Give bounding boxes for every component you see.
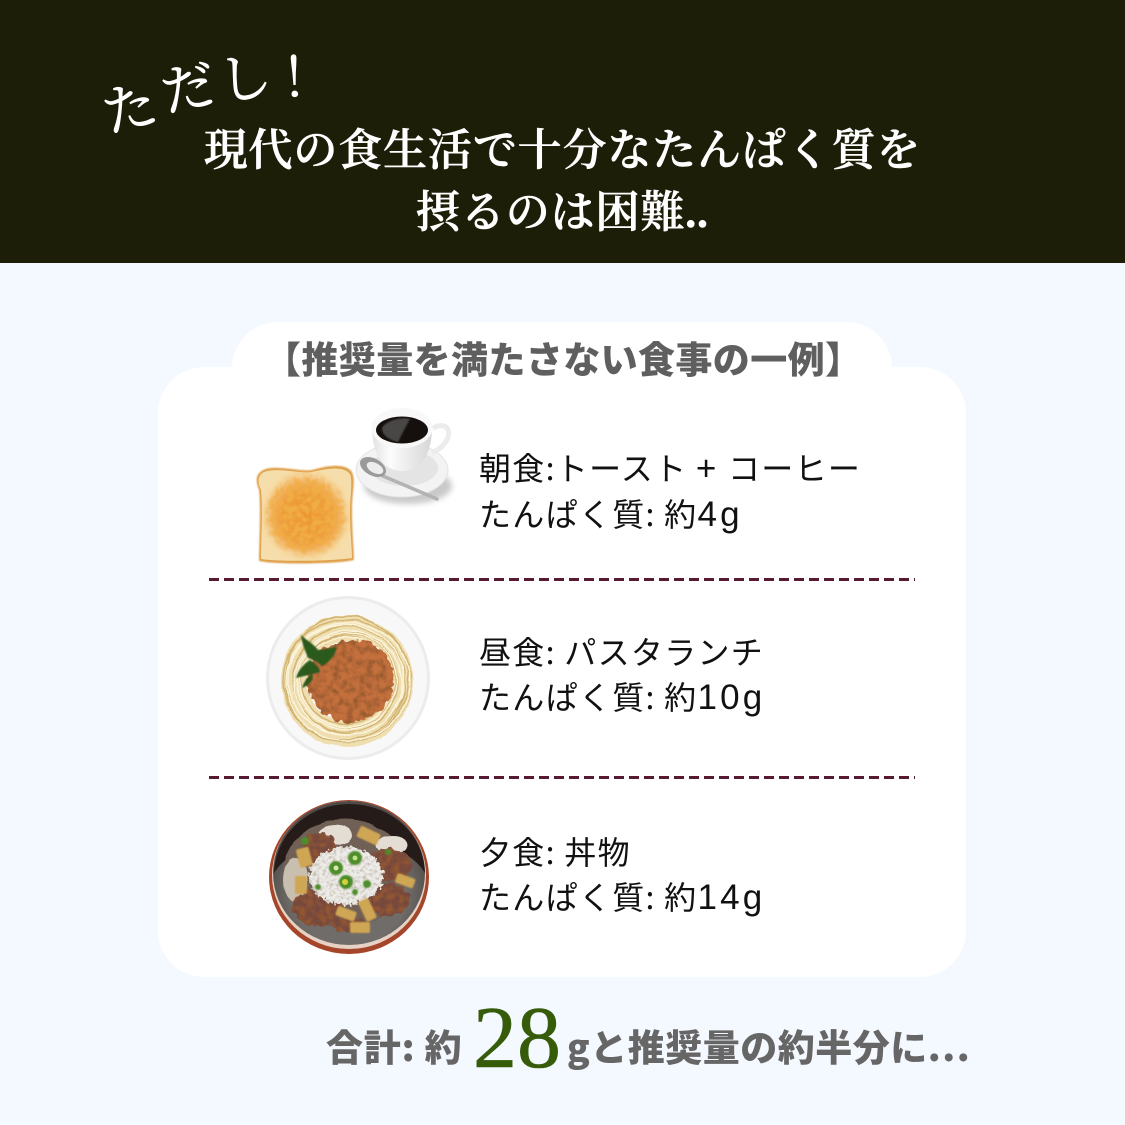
breakfast text: 朝食:トースト + コーヒー xyxy=(479,444,861,490)
dinner text: 夕食: 丼物 xyxy=(479,828,631,874)
lunch text: 昼食: パスタランチ xyxy=(479,628,764,674)
panel: meal examples xyxy=(158,322,966,977)
lunch text xyxy=(479,628,765,719)
breakfast text: たんぱく質: 約4g xyxy=(479,490,743,536)
icon: toast xyxy=(257,466,354,564)
panel heading: 【推奨量を満たさない食事の一例】 xyxy=(264,330,862,384)
title: 現代の食生活で十分なたんぱく質を xyxy=(204,126,921,175)
header band xyxy=(0,0,1125,263)
icon: donburi rice bowl xyxy=(269,800,429,954)
title: 摂るのは困難.. xyxy=(416,188,709,237)
card body xyxy=(158,367,966,977)
icon: pasta plate xyxy=(266,596,430,760)
total label: 合計: 約 xyxy=(326,1018,462,1072)
card tab xyxy=(232,322,892,422)
breakfast text xyxy=(479,444,861,536)
lunch text: たんぱく質: 約10g xyxy=(479,673,765,719)
icon: coffee cup and saucer xyxy=(356,408,452,504)
dinner text: たんぱく質: 約14g xyxy=(479,873,765,919)
title xyxy=(204,126,921,237)
dinner text xyxy=(479,828,765,919)
total conclusion: gと推奨量の約半分に... xyxy=(567,1018,971,1072)
total value 28: 28 xyxy=(473,990,561,1087)
